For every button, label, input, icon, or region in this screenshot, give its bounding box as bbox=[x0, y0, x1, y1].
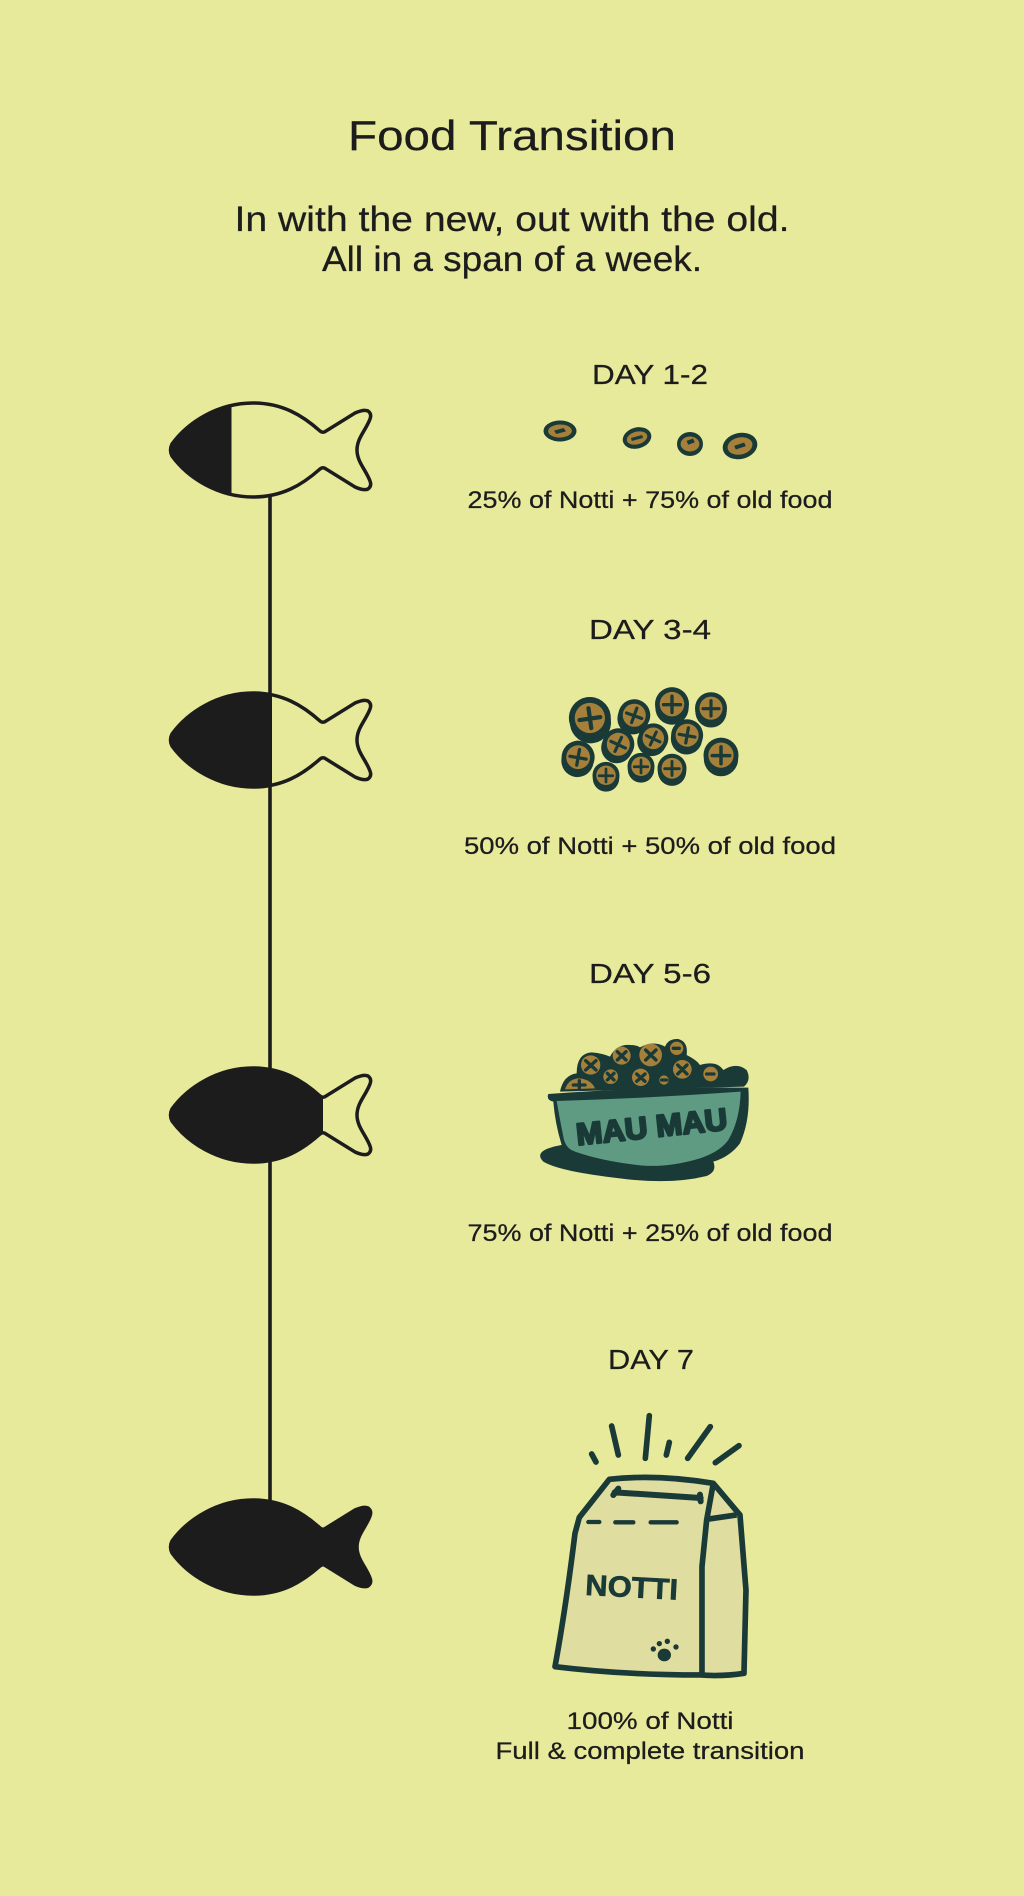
step: day 7 bbox=[496, 1344, 804, 1765]
bag label: NOTTI bbox=[585, 1569, 679, 1607]
icon: fish 75% filled bbox=[170, 1068, 371, 1162]
icon: paw print bbox=[651, 1639, 679, 1661]
title: Food Transition bbox=[348, 112, 676, 159]
icon: a few kibbles bbox=[542, 420, 760, 462]
step: day 1-2 bbox=[468, 359, 832, 514]
day 5-6 heading: DAY 5-6 bbox=[589, 958, 711, 989]
icon: fish 100% filled bbox=[170, 1500, 371, 1594]
day 1-2 caption: 25% of Notti + 75% of old food bbox=[468, 487, 832, 514]
icon: bowl of kibbles bbox=[540, 1039, 749, 1181]
subtitle: All in a span of a week. bbox=[322, 240, 702, 279]
day 7 caption: Full & complete transition bbox=[496, 1738, 804, 1765]
icon: Notti food bag bbox=[555, 1416, 746, 1676]
icon: fish 50% filled bbox=[170, 693, 371, 787]
day 7 heading: DAY 7 bbox=[608, 1344, 694, 1375]
bag body bbox=[555, 1477, 746, 1676]
timeline line bbox=[268, 495, 272, 1501]
step: day 3-4 bbox=[464, 614, 836, 860]
rays bbox=[592, 1416, 739, 1463]
day 1-2 heading: DAY 1-2 bbox=[592, 359, 708, 390]
subtitle bbox=[234, 200, 790, 279]
day 5-6 caption: 75% of Notti + 25% of old food bbox=[468, 1220, 832, 1247]
icon: pile of kibbles bbox=[558, 687, 738, 792]
bowl shadow and outline bbox=[540, 1088, 749, 1181]
bowl body bbox=[557, 1092, 741, 1166]
step: day 5-6 bbox=[468, 958, 832, 1247]
day 7 caption bbox=[496, 1708, 804, 1765]
subtitle: In with the new, out with the old. bbox=[234, 200, 790, 239]
day 7 caption: 100% of Notti bbox=[566, 1708, 734, 1735]
bowl lettering: MAU MAU bbox=[575, 1102, 729, 1152]
day 3-4 caption: 50% of Notti + 50% of old food bbox=[464, 833, 836, 860]
day 3-4 heading: DAY 3-4 bbox=[589, 614, 711, 645]
icon: fish 25% filled bbox=[170, 403, 371, 497]
